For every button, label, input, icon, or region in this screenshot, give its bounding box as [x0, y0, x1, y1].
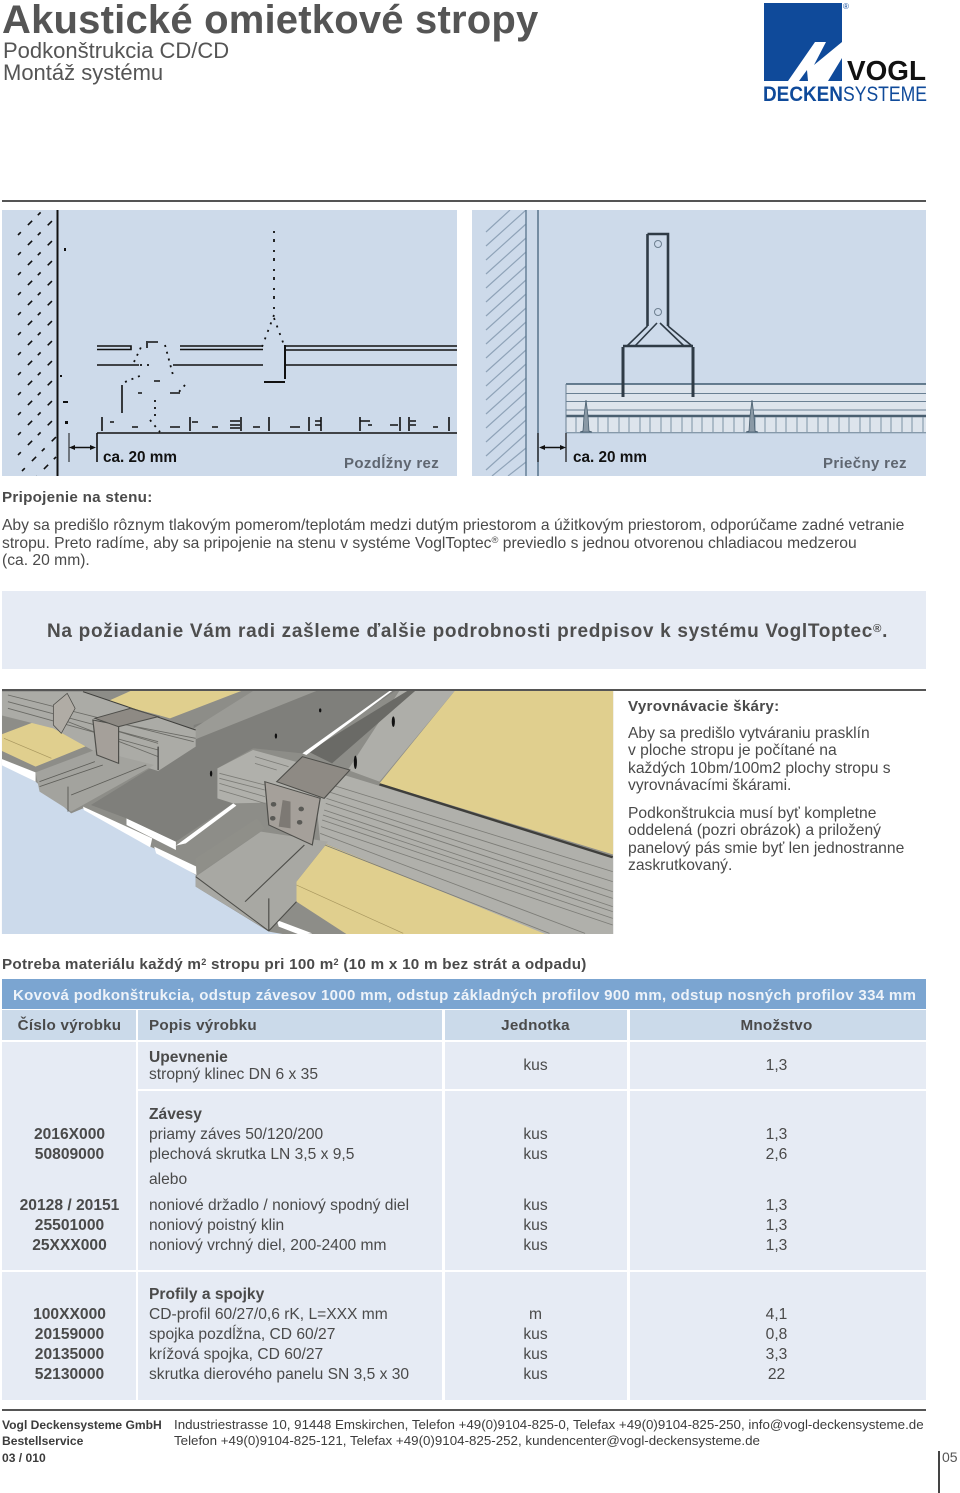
- footer: Bestellservice: [2, 1434, 83, 1448]
- label: ca. 20 mm: ca. 20 mm: [573, 449, 647, 466]
- column: product numbers: 25XXX000: [32, 1237, 107, 1254]
- column: units: kus: [523, 1237, 548, 1254]
- column: descriptions: noniový vrchný diel, 200-2400 mm: [149, 1237, 386, 1254]
- callout: request banner: [2, 591, 926, 669]
- text block: expansion joints: Aby sa predišlo vytváraniu prasklín: [628, 725, 870, 742]
- column: units: kus: [523, 1366, 548, 1383]
- table header row: Množstvo: [740, 1017, 813, 1034]
- column: quantities: [766, 1057, 787, 1383]
- label: Priečny rez: Priečny rez: [823, 455, 907, 472]
- column: product numbers: 20128 / 20151: [20, 1197, 119, 1214]
- column: descriptions: Profily a spojky: [149, 1286, 264, 1303]
- footer: Telefon +49(0)9104-825-121, Telefax +49(0)9104-825-252, kundencenter@vogl-deckensysteme.de: [174, 1433, 760, 1448]
- panel: transverse section diagram: [472, 210, 926, 476]
- column: units: kus: [523, 1197, 548, 1214]
- heading: expansion joints: Vyrovnávacie škáry:: [628, 698, 779, 715]
- column: descriptions: CD-profil 60/27/0,6 rK, L=XXX mm: [149, 1306, 388, 1323]
- column: product numbers: 20135000: [35, 1346, 104, 1363]
- footer: [2, 1417, 924, 1465]
- screw holes: [210, 708, 395, 777]
- logo: Vogl Deckensysteme: ®: [843, 2, 849, 11]
- table: material requirement: [2, 979, 926, 1400]
- column: quantities: 4,1: [766, 1306, 787, 1323]
- icon: wall hatching: [18, 205, 56, 479]
- text block: expansion joints: vyrovnávacími škárami. Podkonštrukcia musí byť kompletne: [628, 777, 876, 822]
- column: descriptions: noniový poistný klin: [149, 1217, 284, 1234]
- ceiling surface: [0, 763, 289, 935]
- text block: expansion joints: panelový pás smie byť len jednostranne: [628, 840, 904, 857]
- column: product numbers: 2016X000: [34, 1126, 105, 1143]
- dimension arrow: [538, 433, 566, 462]
- column: descriptions: alebo: [149, 1171, 187, 1188]
- label: Pozdĺžny rez: Pozdĺžny rez: [344, 454, 439, 472]
- table header row: Číslo výrobku: [18, 1017, 121, 1034]
- text block: wall connection: stropu. Preto radíme, aby sa pripojenie na stenu v systéme VoglToptec® previedlo s jednou otvorenou chladiacou medzerou: [2, 534, 857, 552]
- icon: screws: [580, 400, 758, 432]
- text block: wall connection: (ca. 20 mm).: [2, 552, 90, 569]
- table header row: [2, 1010, 926, 1040]
- column: quantities: 1,3: [766, 1126, 787, 1143]
- table title bar: [2, 979, 926, 1009]
- text block: expansion joints: [628, 725, 904, 874]
- icon: hanger: [623, 234, 693, 397]
- column: descriptions: skrutka dierového panelu SN 3,5 x 30: [149, 1366, 409, 1383]
- column: units: kus: [523, 1346, 548, 1363]
- subtitle: Podkonštrukcia CD/CD: [3, 38, 229, 63]
- upper short profile: [0, 692, 196, 771]
- column: quantities: 22: [768, 1366, 785, 1383]
- column: descriptions: priamy záves 50/120/200: [149, 1126, 323, 1143]
- subtitle: Montáž systému: [3, 60, 163, 85]
- label: ca. 20 mm: ca. 20 mm: [103, 449, 177, 466]
- logo: Vogl Deckensysteme: VOGL: [847, 55, 926, 86]
- column: descriptions: spojka pozdĺžna, CD 60/27: [149, 1326, 335, 1343]
- text block: wall connection: Aby sa predišlo rôznym tlakovým pomerom/teplotám medzi dutým priestorom a úžitkovým priestorom, odporúčame zadné vetranie: [2, 517, 904, 534]
- column: product numbers: [20, 1126, 119, 1383]
- text block: expansion joints: zaskrutkovaný.: [628, 857, 732, 874]
- column: quantities: 3,3: [766, 1346, 787, 1363]
- text block: expansion joints: každých 10bm/100m2 plochy stropu s: [628, 760, 891, 777]
- page number: [938, 1451, 960, 1493]
- long cross profile: [218, 750, 614, 934]
- table header row: Popis výrobku: [149, 1017, 257, 1034]
- column: units: kus: [523, 1146, 548, 1163]
- footer: 03 / 010: [2, 1451, 46, 1465]
- left U channel: [36, 750, 154, 812]
- column: units: kus: [523, 1126, 548, 1143]
- board layers: [566, 384, 926, 433]
- column: descriptions: krížová spojka, CD 60/27: [149, 1346, 323, 1363]
- column: units: [523, 1057, 548, 1383]
- column: descriptions: Závesy: [149, 1106, 202, 1123]
- heading: material requirement: Potreba materiálu každý m2 stropu pri 100 m2 (10 m x 10 m bez strát a odpadu): [2, 956, 587, 973]
- illustration: 3D ceiling substructure: [2, 691, 614, 934]
- column: quantities: 1,3: [766, 1057, 787, 1074]
- column: quantities: 1,3: [766, 1217, 787, 1234]
- column: units: m: [529, 1306, 542, 1323]
- icon: cross clips: [53, 693, 350, 845]
- column: quantities: 1,3: [766, 1197, 787, 1214]
- column: units: kus: [523, 1326, 548, 1343]
- column: descriptions: plechová skrutka LN 3,5 x 9,5: [149, 1146, 354, 1163]
- heading: wall connection: Pripojenie na stenu:: [2, 489, 153, 506]
- icon: wall hatching: [486, 210, 526, 476]
- footer: Vogl Deckensysteme GmbH: [2, 1418, 162, 1432]
- page number: 05: [942, 1449, 958, 1465]
- column: quantities: 2,6: [766, 1146, 787, 1163]
- logo: Vogl Deckensysteme: [763, 2, 927, 106]
- column: quantities: 1,3: [766, 1237, 787, 1254]
- table body backgrounds: [2, 1042, 926, 1400]
- profile lines: [69, 341, 457, 462]
- subtitle: [3, 38, 229, 85]
- plaster panels: [2, 691, 614, 934]
- table title bar: Kovová podkonštrukcia, odstup závesov 1000 mm, odstup základných profilov 900 mm, odstup nosných profilov 334 mm: [13, 987, 916, 1004]
- gaps and white board edges: [0, 758, 312, 935]
- column: product numbers: 100XX000: [33, 1306, 106, 1323]
- column: product numbers: 50809000: [35, 1146, 104, 1163]
- column: descriptions: noniové držadlo / noniový spodný diel: [149, 1197, 409, 1214]
- column: descriptions: [149, 1049, 409, 1383]
- dark floor: [91, 691, 395, 842]
- column: units: kus: [523, 1217, 548, 1234]
- logo: Vogl Deckensysteme: DECKEN: [763, 83, 843, 106]
- column: product numbers: 25501000: [35, 1217, 104, 1234]
- text block: expansion joints: v ploche stropu je počítané na: [628, 742, 837, 759]
- column: quantities: 0,8: [766, 1326, 787, 1343]
- dotted hanger and clip: [125, 231, 284, 432]
- text block: wall connection: [2, 517, 904, 569]
- lower U channel: [195, 832, 326, 932]
- panel: longitudinal section diagram: [2, 210, 457, 476]
- text block: expansion joints: oddelená (pozri obrázok) a priložený: [628, 822, 881, 839]
- footer: Industriestrasse 10, 91448 Emskirchen, Telefon +49(0)9104-825-0, Telefax +49(0)9104-825-250, info@vogl-deckensysteme.de: [174, 1417, 924, 1432]
- column: descriptions: Upevnenie: [149, 1049, 228, 1066]
- column: product numbers: 52130000: [35, 1366, 104, 1383]
- callout: request banner: Na požiadanie Vám radi zašleme ďalšie podrobnosti predpisov k systému VoglToptec®.: [47, 621, 888, 642]
- column: product numbers: 20159000: [35, 1326, 104, 1343]
- column: descriptions: stropný klinec DN 6 x 35: [149, 1066, 318, 1083]
- column: units: kus: [523, 1057, 548, 1074]
- table header row: Jednotka: [501, 1017, 570, 1034]
